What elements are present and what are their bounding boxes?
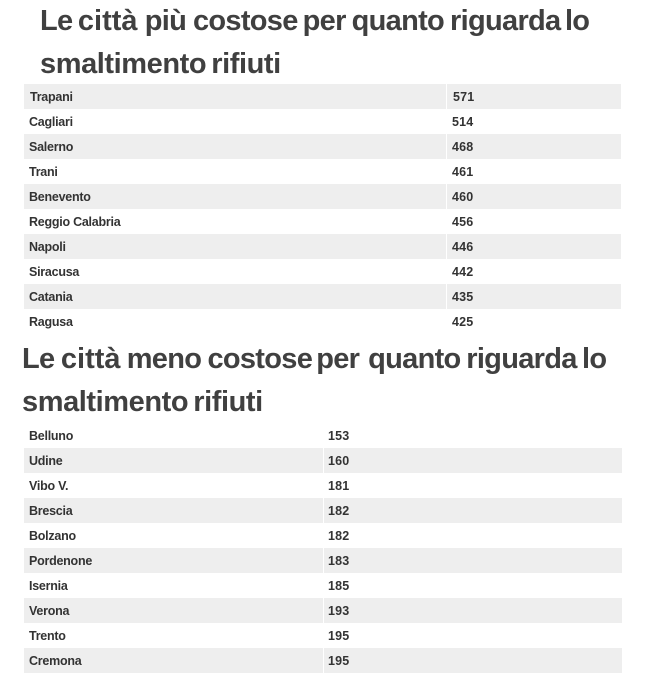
heading: least expensive cities <box>22 343 606 418</box>
heading: least expensive cities: città <box>61 343 121 375</box>
table: least expensive cities: Cremona <box>29 654 81 668</box>
heading: most expensive cities: smaltimento rifiuti <box>40 48 281 80</box>
table: most expensive cities: Benevento <box>29 190 91 204</box>
table: least expensive cities: 153 <box>328 429 349 443</box>
table: most expensive cities: Trapani <box>30 90 73 104</box>
heading: most expensive cities: per <box>303 5 346 37</box>
heading: most expensive cities: più <box>145 5 186 37</box>
table: least expensive cities: Brescia <box>29 504 72 518</box>
table: least expensive cities: Verona <box>29 604 69 618</box>
table: most expensive cities: Ragusa <box>29 315 73 329</box>
heading: least expensive cities: costose <box>207 343 312 375</box>
heading: most expensive cities: riguarda <box>450 5 560 37</box>
table: least expensive cities: Udine <box>29 454 62 468</box>
table: most expensive cities: 571 <box>453 90 474 104</box>
table: least expensive cities: Vibo V. <box>29 479 68 493</box>
heading: least expensive cities: quanto <box>368 343 461 375</box>
heading: least expensive cities: riguarda <box>466 343 577 375</box>
heading: least expensive cities: meno <box>127 343 201 375</box>
table: least expensive cities: 181 <box>328 479 349 493</box>
table: least expensive cities: 182 <box>328 529 349 543</box>
table: least expensive cities: Bolzano <box>29 529 76 543</box>
heading: most expensive cities: Le <box>40 5 72 37</box>
table: most expensive cities: Cagliari <box>29 115 73 129</box>
table: most expensive cities: Reggio Calabria <box>29 215 120 229</box>
table: least expensive cities <box>24 429 622 673</box>
table: least expensive cities: 193 <box>328 604 349 618</box>
heading: most expensive cities: lo <box>565 5 589 37</box>
table: most expensive cities: 446 <box>452 240 473 254</box>
table: most expensive cities <box>24 84 621 329</box>
heading: least expensive cities: lo <box>582 343 606 375</box>
table: most expensive cities: 468 <box>452 140 473 154</box>
table: least expensive cities: 195 <box>328 629 349 643</box>
heading: least expensive cities: Le <box>22 343 54 375</box>
heading: least expensive cities: smaltimento rifiuti <box>22 386 263 418</box>
table: most expensive cities: 442 <box>452 265 473 279</box>
table: most expensive cities: Trani <box>29 165 58 179</box>
table: most expensive cities: Salerno <box>29 140 73 154</box>
heading: most expensive cities: quanto <box>352 5 444 37</box>
table: least expensive cities: Belluno <box>29 429 73 443</box>
table: least expensive cities: 185 <box>328 579 349 593</box>
table: most expensive cities: 461 <box>452 165 473 179</box>
table: least expensive cities: Trento <box>29 629 66 643</box>
table: least expensive cities: 195 <box>328 654 349 668</box>
table: most expensive cities: 425 <box>452 315 473 329</box>
heading: most expensive cities: costose <box>193 5 298 37</box>
table: least expensive cities: Isernia <box>29 579 68 593</box>
table: least expensive cities: 182 <box>328 504 349 518</box>
table: least expensive cities: 183 <box>328 554 349 568</box>
table: most expensive cities: 456 <box>452 215 473 229</box>
table: most expensive cities: Napoli <box>29 240 66 254</box>
heading: least expensive cities: per <box>316 343 359 375</box>
table: least expensive cities: 160 <box>328 454 349 468</box>
table: least expensive cities: Pordenone <box>29 554 92 568</box>
table: most expensive cities: 435 <box>452 290 473 304</box>
table: most expensive cities: Catania <box>29 290 72 304</box>
heading: most expensive cities <box>40 5 589 80</box>
heading: most expensive cities: città <box>78 5 138 37</box>
table: most expensive cities: 514 <box>452 115 473 129</box>
table: most expensive cities: 460 <box>452 190 473 204</box>
table: most expensive cities: Siracusa <box>29 265 79 279</box>
